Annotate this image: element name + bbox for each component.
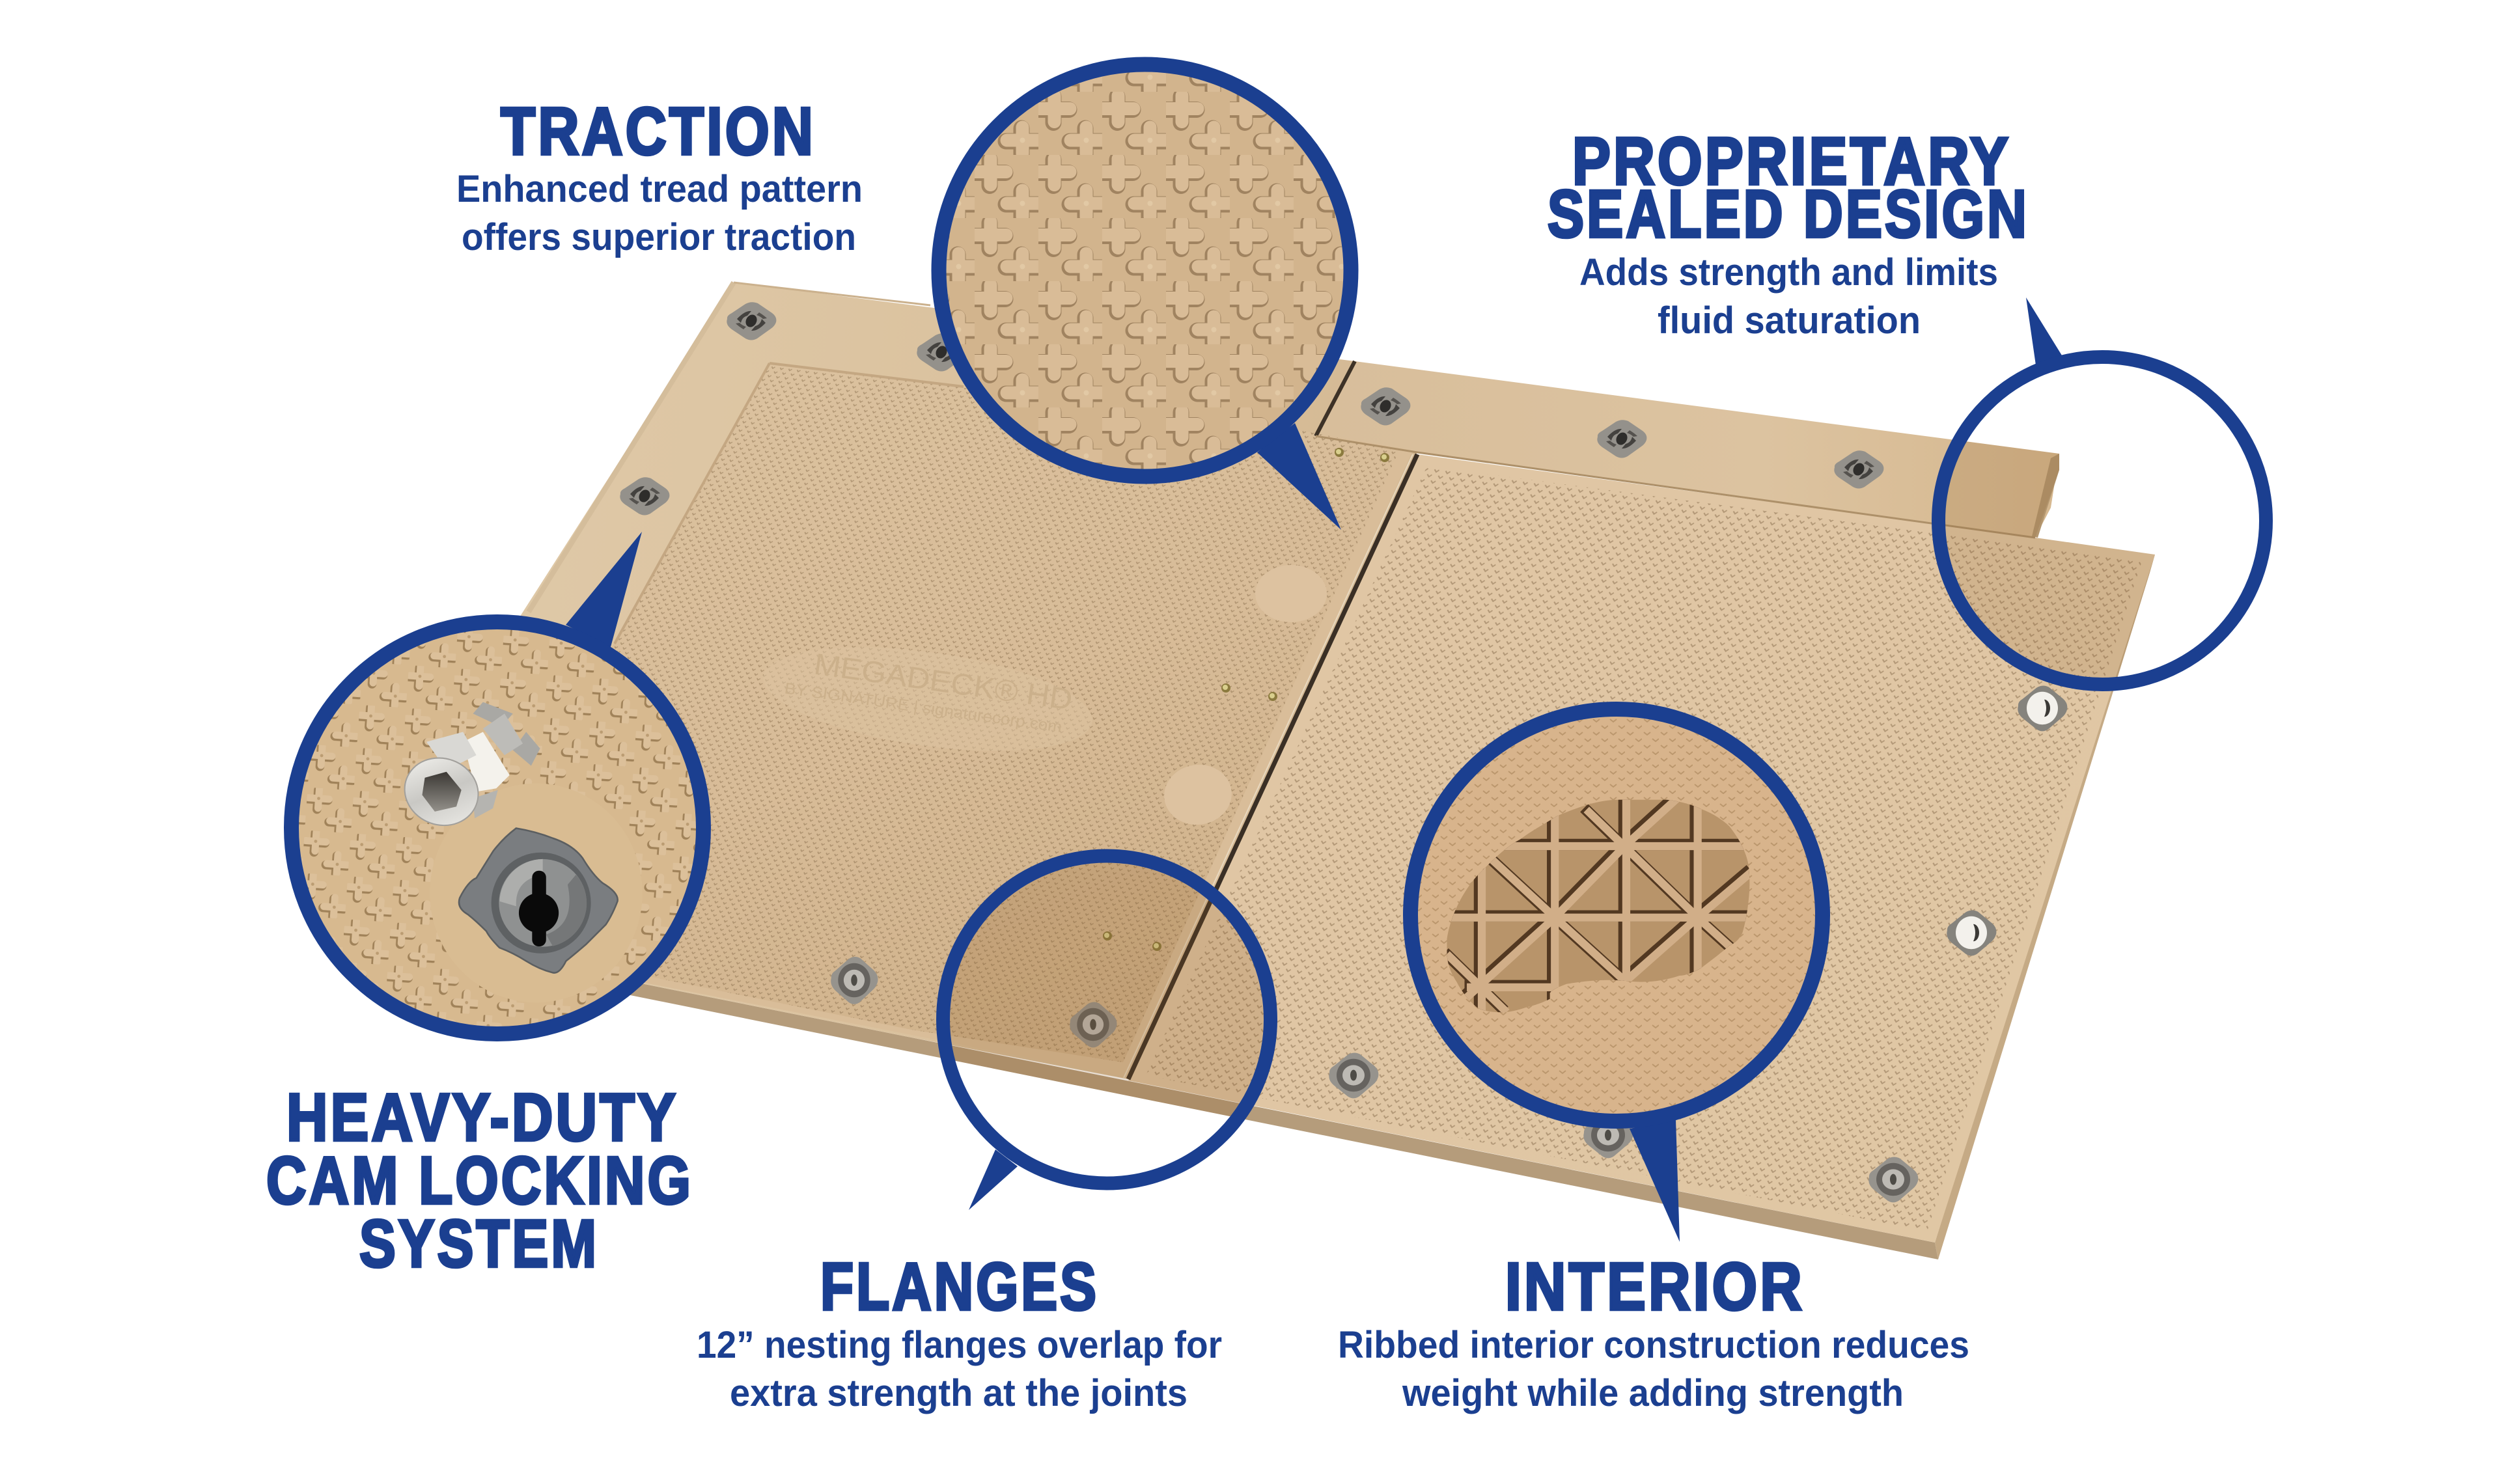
- callout pointer: [1630, 1120, 1680, 1242]
- molded logo: [757, 629, 1099, 769]
- callout: interior magnifier: [1403, 702, 1830, 1242]
- bare round patches on tread: [1160, 565, 1327, 829]
- ring: [292, 622, 703, 1034]
- description: flanges: extra strength at the joints: [730, 1372, 1188, 1414]
- heading: traction: TRACTION: [501, 94, 816, 169]
- description: interior: Ribbed interior construction reduces: [1338, 1324, 1969, 1366]
- heading: proprietary sealed design: PROPRIETARY: [1572, 124, 2011, 199]
- ring: [1939, 357, 2266, 685]
- back panel skirt edges: [324, 555, 2155, 1259]
- molded logo: BY SIGNATURE | signaturecorp.com: [783, 680, 1063, 736]
- right panel: tread face: [1128, 454, 2155, 1243]
- description: traction: [456, 168, 863, 258]
- text block: traction: [456, 94, 863, 258]
- product photo: interlocking deck panels: [324, 282, 2155, 1259]
- callout: proprietary sealed design magnifier: [1932, 297, 2273, 691]
- callout: traction magnifier: [931, 59, 1361, 530]
- tread close-up: [947, 72, 1344, 469]
- smooth area around cam: [430, 784, 643, 1002]
- locking receptacle: [459, 828, 618, 973]
- text block: interior: [1338, 1249, 1969, 1414]
- callout pointer: [566, 532, 642, 647]
- heading: heavy-duty cam locking system: HEAVY-DUTY: [286, 1080, 678, 1155]
- description: proprietary sealed design: Adds strength and limits: [1579, 251, 1998, 294]
- cam lock fasteners: [620, 302, 2067, 1202]
- heading: interior: INTERIOR: [1505, 1249, 1805, 1324]
- description: flanges: [697, 1324, 1222, 1414]
- panel seams: [1124, 361, 2035, 1079]
- heading: heavy-duty cam locking system: [266, 1080, 693, 1281]
- tinted board inside lens: [950, 863, 1264, 1116]
- heading: proprietary sealed design: [1548, 124, 2029, 251]
- description: traction: offers superior traction: [462, 216, 856, 258]
- callout pointer: [1257, 423, 1341, 530]
- left panel: border flange: [326, 282, 1417, 1079]
- callout pointer: [2026, 297, 2062, 365]
- tinted board inside lens: [1945, 441, 2155, 678]
- tread and hardware close-up: [299, 629, 696, 1026]
- text block: flanges: [697, 1249, 1222, 1414]
- ring: [1410, 709, 1823, 1121]
- description: interior: weight while adding strength: [1402, 1372, 1904, 1414]
- description: traction: Enhanced tread pattern: [456, 168, 863, 210]
- heading: heavy-duty cam locking system: SYSTEM: [359, 1206, 599, 1281]
- ribbed interior: [1447, 799, 1750, 1013]
- silver cam key: [404, 702, 540, 827]
- description: interior: [1338, 1324, 1969, 1414]
- left panel: tread face: [329, 363, 1413, 1077]
- text block: proprietary sealed design: [1548, 124, 2029, 342]
- right panel: rear flange: [1316, 361, 2059, 538]
- heading: flanges: FLANGES: [820, 1249, 1099, 1324]
- ring: [943, 856, 1271, 1183]
- callout: flanges magnifier: [936, 849, 1277, 1210]
- cutaway close-up: [1418, 717, 1815, 1114]
- heading: heavy-duty cam locking system: CAM LOCKING: [266, 1143, 693, 1218]
- description: proprietary sealed design: [1579, 251, 1998, 342]
- ring: [939, 64, 1351, 476]
- description: proprietary sealed design: fluid saturation: [1658, 299, 1921, 342]
- callout: heavy-duty cam locking magnifier: [286, 532, 710, 1041]
- brass rivets: [1103, 448, 1389, 951]
- callout pointer: [969, 1149, 1018, 1210]
- description: flanges: 12” nesting flanges overlap for: [697, 1324, 1222, 1366]
- molded logo: MEGADECK® HD: [812, 646, 1075, 717]
- heading: proprietary sealed design: SEALED DESIGN: [1548, 176, 2029, 251]
